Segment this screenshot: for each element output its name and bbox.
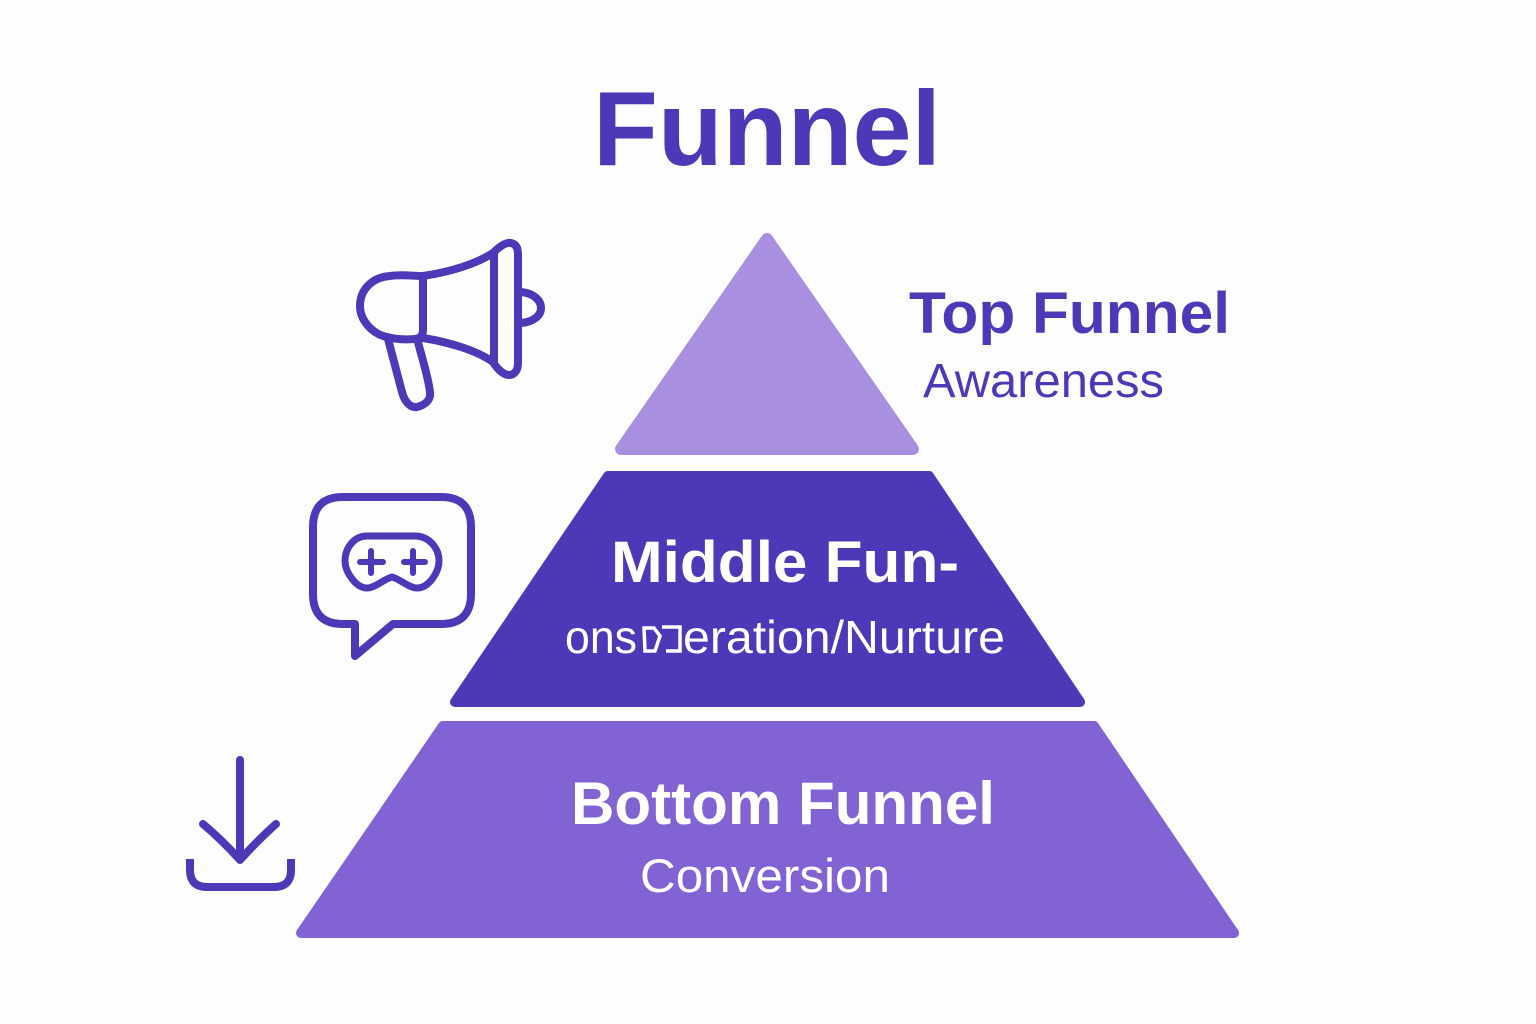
title: Funnel [593,70,941,188]
panel: middle funnel tier [455,476,1080,702]
middle tier subtitle [565,611,1005,663]
panel: top funnel tier [621,239,913,449]
bottom tier heading: Bottom Funnel [571,770,995,837]
bottom tier subtitle: Conversion [640,849,890,902]
middle tier subtitle: ons [565,611,637,663]
bottom tier shape [301,726,1234,933]
top funnel heading: Top Funnel [909,281,1230,346]
middle tier heading: Middle Fun- [611,530,959,595]
icon: megaphone [360,243,541,407]
icon: chat bubble with game controller [313,497,471,656]
panel: bottom funnel tier [301,726,1234,933]
middle tier subtitle: eration/Nurture [683,611,1005,663]
top funnel subtitle: Awareness [923,355,1164,408]
speech bubble outline [313,497,471,656]
top funnel label [909,281,1230,408]
game controller [345,536,439,588]
middle tier shape [455,476,1080,702]
icon: download arrow [190,760,291,887]
